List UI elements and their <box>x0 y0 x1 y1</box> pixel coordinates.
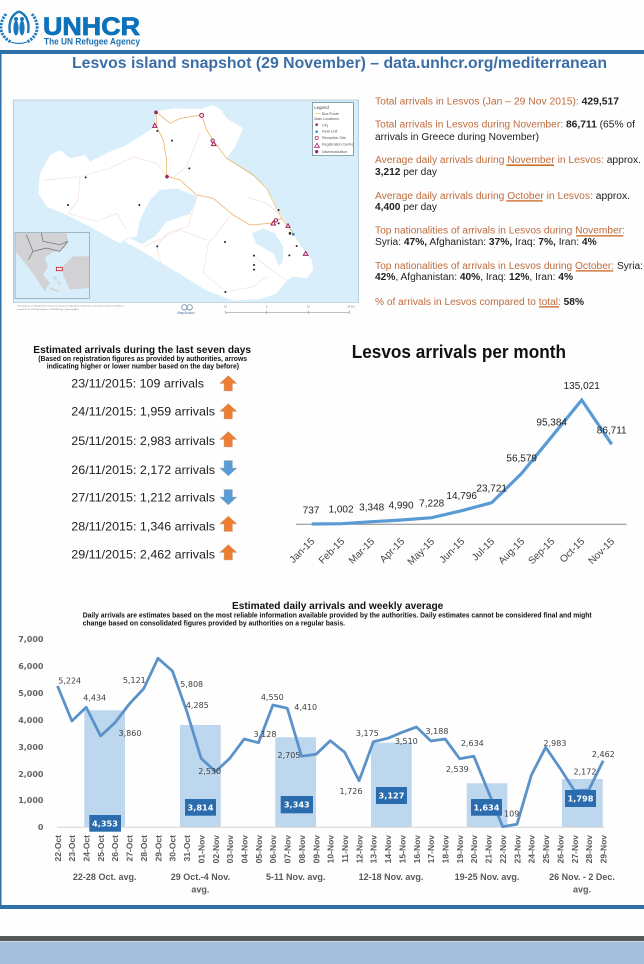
daily data labels: 109 <box>504 810 519 819</box>
map legend: Field Unit <box>322 130 337 134</box>
monthly chart heading: Lesvos arrivals per month <box>352 342 566 362</box>
y axis labels: 7,000 <box>18 635 44 644</box>
daily data labels: 2,462 <box>592 750 615 759</box>
daily rows: 26/11/2015: 2,172 arrivals <box>71 463 215 477</box>
November daily average <box>375 155 641 178</box>
map footnote and scale bar: 0 <box>266 305 268 309</box>
x axis date labels: 26-Oct <box>110 835 120 861</box>
y axis labels: 3,000 <box>18 743 44 752</box>
weekly average value boxes: 3,814 <box>188 802 214 812</box>
daily rows: 27/11/2015: 1,212 arrivals <box>71 491 215 505</box>
November daily average: Average daily arrivals during November in Lesvos: approx. <box>375 155 641 166</box>
map legend: Legend <box>314 105 329 110</box>
logo wordmark: UNHCR <box>43 13 140 41</box>
x axis date labels: 27-Nov <box>570 835 580 863</box>
x axis date labels: 05-Nov <box>254 835 264 863</box>
daily data labels <box>58 676 615 819</box>
daily chart note: Daily arrivals are estimates based on the most reliable information available provided by the authorities. Daily estimates cannot be considered final and might <box>83 613 592 620</box>
map footnote and scale bar: 20 Km <box>347 305 356 309</box>
weekly group labels: 12-18 Nov. avg. <box>359 872 423 882</box>
November total: arrivals in Greece during November) <box>375 132 539 143</box>
y axis labels: 5,000 <box>18 689 44 698</box>
weekly average value boxes: 3,127 <box>379 790 405 800</box>
x axis date labels: 25-Oct <box>96 835 106 861</box>
daily data labels: 2,634 <box>461 739 484 748</box>
total arrivals: Total arrivals in Lesvos (Jan – 29 Nov 2015): 429,517 <box>375 96 620 108</box>
y axis labels: 4,000 <box>18 716 44 725</box>
November total <box>375 120 635 143</box>
seven days heading: Estimated arrivals during the last seven days <box>33 344 251 356</box>
weekly group labels: 29 Oct.-4 Nov. <box>171 872 230 882</box>
daily data labels: 3,188 <box>426 727 448 736</box>
weekly group labels: 19-25 Nov. avg. <box>455 872 519 882</box>
weekly average value boxes: 3,343 <box>284 800 310 810</box>
weekly average value boxes: 1,798 <box>568 794 594 804</box>
daily chart heading: Estimated daily arrivals and weekly average <box>232 601 444 612</box>
x axis date labels: 13-Nov <box>369 835 379 863</box>
y axis labels: 1,000 <box>18 796 44 805</box>
y axis labels: 6,000 <box>18 662 44 671</box>
x axis date labels: 21-Nov <box>484 835 494 863</box>
monthly data labels <box>303 381 627 516</box>
x axis date labels: 02-Nov <box>211 835 221 863</box>
x axis date labels: 18-Nov <box>440 835 450 863</box>
daily chart note: change based on consolidated figures provided by authorities on a regular basis. <box>83 621 345 628</box>
map legend: Main Locations <box>314 117 339 121</box>
daily data labels: 3,860 <box>119 729 141 738</box>
monthly axis labels: Jun-15 <box>438 536 467 566</box>
city markers <box>67 130 298 293</box>
map footnote and scale bar: MapAction <box>177 311 195 315</box>
UNHCR logo <box>1 12 140 46</box>
November daily average: 3,212 per day <box>375 167 437 178</box>
x axis date labels: 17-Nov <box>426 835 436 863</box>
November nationalities: Syria: 47%, Afghanistan: 37%, Iraq: 7%, Iran: 4% <box>375 237 597 248</box>
map legend: City <box>322 123 328 127</box>
monthly axis labels: Jan-15 <box>288 536 317 566</box>
weekly group labels: avg. <box>573 885 591 895</box>
daily data labels: 2,705 <box>278 751 300 760</box>
y axis labels: 2,000 <box>18 770 44 779</box>
monthly data labels: 1,002 <box>328 505 354 516</box>
monthly axis labels: May-15 <box>406 536 437 568</box>
daily data labels: 5,808 <box>180 680 203 689</box>
November nationalities <box>375 226 625 248</box>
weekly group labels: 26 Nov. - 2 Dec. <box>549 872 615 882</box>
island landmass <box>38 105 313 301</box>
October daily average: 4,400 per day <box>375 202 437 213</box>
x axis date labels: 24-Oct <box>82 835 92 861</box>
monthly axis labels: Jul-15 <box>470 536 497 563</box>
October daily average: Average daily arrivals during October in Lesvos: approx. <box>375 191 630 202</box>
monthly line <box>312 400 612 524</box>
x axis date labels: 07-Nov <box>283 835 293 863</box>
monthly data labels: 86,711 <box>597 426 627 437</box>
x axis date labels: 23-Nov <box>512 835 522 863</box>
daily rows: 24/11/2015: 1,959 arrivals <box>71 405 215 419</box>
x axis date labels: 09-Nov <box>311 835 321 863</box>
monthly axis labels <box>288 536 617 568</box>
x axis date labels: 27-Oct <box>125 835 135 861</box>
daily data labels: 4,550 <box>261 693 284 702</box>
x axis date labels: 29-Nov <box>598 835 608 863</box>
x axis date labels: 20-Nov <box>469 835 479 863</box>
weekly group labels <box>73 872 615 895</box>
monthly data labels: 135,021 <box>564 381 600 392</box>
gulf of Gera <box>252 228 283 267</box>
map legend: Disembarkation <box>322 150 347 154</box>
monthly data labels: 3,348 <box>359 503 385 514</box>
map footnote and scale bar: Created 29 Oct 2015 Map Projection: UTM 35N Data: OpenStreetMap <box>17 308 79 311</box>
x axis date labels: 31-Oct <box>182 835 192 861</box>
x axis date labels: 25-Nov <box>541 835 551 863</box>
daily data labels: 5,121 <box>123 676 146 685</box>
daily data labels: 2,983 <box>544 739 566 748</box>
x axis date labels: 30-Oct <box>168 835 178 861</box>
daily data labels: 3,128 <box>254 730 276 739</box>
x axis date labels: 15-Nov <box>397 835 407 863</box>
x axis date labels: 19-Nov <box>455 835 465 863</box>
x axis date labels: 16-Nov <box>412 835 422 863</box>
map legend: Registration Centre <box>322 143 353 147</box>
daily rows: 23/11/2015: 109 arrivals <box>71 377 204 391</box>
monthly axis labels: Apr-15 <box>378 536 407 565</box>
monthly axis labels: Nov-15 <box>587 536 617 567</box>
x axis date labels: 24-Nov <box>527 835 537 863</box>
x axis date labels: 06-Nov <box>268 835 278 863</box>
trend arrows <box>220 376 237 560</box>
x axis date labels: 23-Oct <box>67 835 77 861</box>
monthly axis labels: Sep-15 <box>527 536 557 567</box>
monthly data labels: 4,990 <box>388 500 414 511</box>
x axis date labels: 28-Oct <box>139 835 149 861</box>
minor roads <box>43 133 287 292</box>
daily rows <box>71 377 215 562</box>
chart: Lesvos arrivals per month <box>288 342 627 568</box>
daily data labels: 2,172 <box>574 767 596 776</box>
October nationalities: Top nationalities of arrivals in Lesvos during October: Syria: <box>375 261 643 272</box>
October daily average <box>375 191 630 213</box>
x axis date labels: 22-Oct <box>53 835 63 861</box>
map footnote and scale bar: 10 <box>224 305 227 309</box>
key figures text block <box>375 96 643 308</box>
logo tagline: The UN Refugee Agency <box>44 36 140 46</box>
x axis date labels <box>53 835 609 863</box>
map legend: Reception Site <box>322 136 346 140</box>
weekly average value boxes: 4,353 <box>92 818 118 828</box>
daily arrivals line <box>58 658 603 827</box>
monthly data labels: 7,228 <box>419 499 445 510</box>
y axis labels: 0 <box>38 823 44 832</box>
x axis date labels: 14-Nov <box>383 835 393 863</box>
November nationalities: Top nationalities of arrivals in Lesvos during November: <box>375 226 625 237</box>
x axis date labels: 08-Nov <box>297 835 307 863</box>
title: Lesvos island snapshot (29 November) – data.unhcr.org/mediterranean <box>72 55 607 72</box>
daily data labels: 3,175 <box>356 729 379 738</box>
map legend <box>312 103 353 156</box>
icon: laurel and sheltering hands <box>1 12 37 44</box>
daily rows: 25/11/2015: 2,983 arrivals <box>71 434 215 448</box>
x axis date labels: 11-Nov <box>340 835 350 863</box>
monthly axis labels: Mar-15 <box>347 536 377 567</box>
map legend: Bus Route <box>322 112 339 116</box>
x axis date labels: 28-Nov <box>584 835 594 863</box>
daily rows: 28/11/2015: 1,346 arrivals <box>71 520 215 534</box>
gulf of Kalloni <box>130 188 197 244</box>
map footnote and scale bar: The boundaries and designations used on this map do not imply official endorsement or acceptance by the United Nations. <box>17 305 125 308</box>
daily data labels: 5,224 <box>58 677 81 686</box>
monthly data labels: 56,579 <box>506 454 537 465</box>
share of total: % of arrivals in Lesvos compared to total: 58% <box>375 297 584 308</box>
seven days note: indicating higher or lower number based on the day before) <box>47 363 239 370</box>
daily data labels: 3,510 <box>395 737 418 746</box>
daily data labels: 2,539 <box>446 765 469 774</box>
weekly average value boxes <box>89 787 596 832</box>
daily rows: 29/11/2015: 2,462 arrivals <box>71 548 215 562</box>
weekly group labels: 22-28 Oct. avg. <box>73 872 136 882</box>
monthly axis labels: Oct-15 <box>558 536 587 565</box>
daily data labels: 1,726 <box>340 787 362 796</box>
map panel <box>13 100 359 315</box>
x axis date labels: 22-Nov <box>498 835 508 863</box>
monthly axis labels: Feb-15 <box>317 536 347 567</box>
seven days note: (Based on registration figures as provided by authorities, arrows <box>38 356 247 363</box>
panel: last seven days <box>33 344 251 562</box>
y axis labels <box>18 635 44 832</box>
weekly average bars <box>84 710 603 827</box>
weekly group labels: 5-11 Nov. avg. <box>266 872 325 882</box>
monthly data labels: 95,384 <box>536 418 567 429</box>
x axis date labels: 03-Nov <box>225 835 235 863</box>
monthly axis labels: Aug-15 <box>497 536 527 567</box>
chart: estimated daily arrivals and weekly average <box>18 601 615 895</box>
x axis date labels: 29-Oct <box>153 835 163 861</box>
underlines <box>506 164 623 308</box>
monthly data labels: 737 <box>303 505 320 516</box>
November total: Total arrivals in Lesvos during November: 86,711 (65% of <box>375 120 635 131</box>
monthly data labels: 23,721 <box>476 484 507 495</box>
October nationalities <box>375 261 643 283</box>
reception and registration site markers <box>153 111 308 255</box>
daily data labels: 2,530 <box>198 767 221 776</box>
daily data labels: 4,434 <box>83 693 106 702</box>
October nationalities: 42%, Afghanistan: 40%, Iraq: 12%, Iran: 4% <box>375 272 573 283</box>
daily chart note <box>83 613 592 628</box>
bus routes <box>156 112 293 233</box>
footer band <box>0 936 644 964</box>
inset locator map <box>15 232 89 298</box>
daily data labels: 4,410 <box>294 703 317 712</box>
map footnote and scale bar <box>17 305 356 315</box>
daily data labels: 4,285 <box>186 701 209 710</box>
seven days note <box>38 356 247 370</box>
x axis date labels: 01-Nov <box>196 835 206 863</box>
monthly data labels: 14,796 <box>446 491 477 502</box>
map footnote and scale bar: 10 <box>307 305 310 309</box>
x axis date labels: 26-Nov <box>555 835 565 863</box>
x axis date labels: 12-Nov <box>354 835 364 863</box>
weekly group labels: avg. <box>191 885 209 895</box>
weekly average value boxes: 1,634 <box>474 802 500 812</box>
x axis date labels: 10-Nov <box>326 835 336 863</box>
x axis date labels: 04-Nov <box>240 835 250 863</box>
